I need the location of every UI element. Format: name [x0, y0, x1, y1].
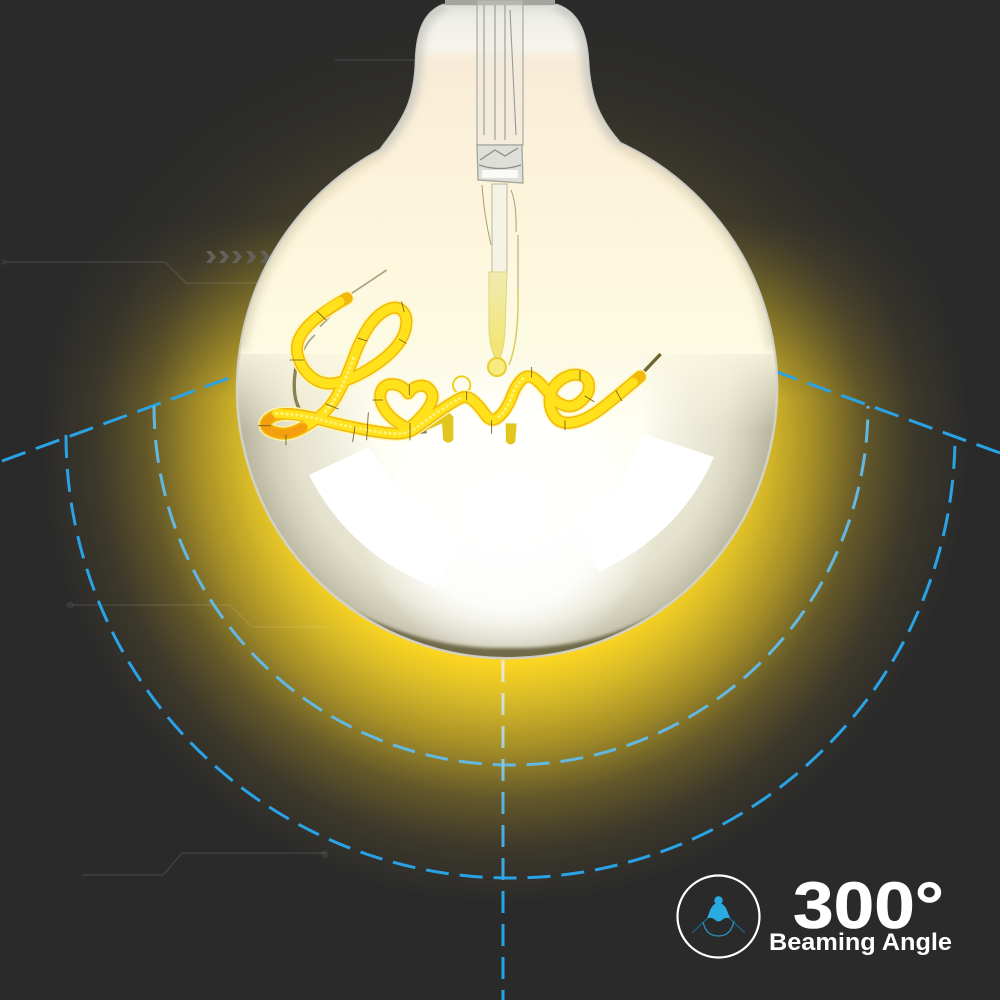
value 300°: 300° [793, 868, 944, 942]
dark rear support wires [294, 270, 661, 444]
filament body [266, 298, 640, 434]
filament bright core [277, 302, 633, 434]
bulb glass body [230, 0, 790, 670]
bulb outline [237, 5, 777, 658]
label Beaming Angle: Beaming Angle [769, 929, 952, 956]
light bulb [230, 0, 790, 670]
metal collar at top [445, 0, 555, 5]
filament orange end [266, 418, 303, 434]
icon: beam angle [678, 876, 760, 958]
filament word Love [258, 298, 640, 445]
filament LED dots [277, 358, 523, 434]
beaming angle badge [678, 868, 952, 958]
white reflection left [309, 447, 462, 587]
glass stem and wires [477, 0, 523, 376]
beam angle dashed guides [2, 372, 1000, 1000]
chevron arrows [206, 251, 270, 263]
white reflection right [582, 433, 714, 572]
technical decoration lines [1, 60, 416, 875]
filament clips [258, 302, 622, 445]
filament halo [266, 298, 640, 434]
